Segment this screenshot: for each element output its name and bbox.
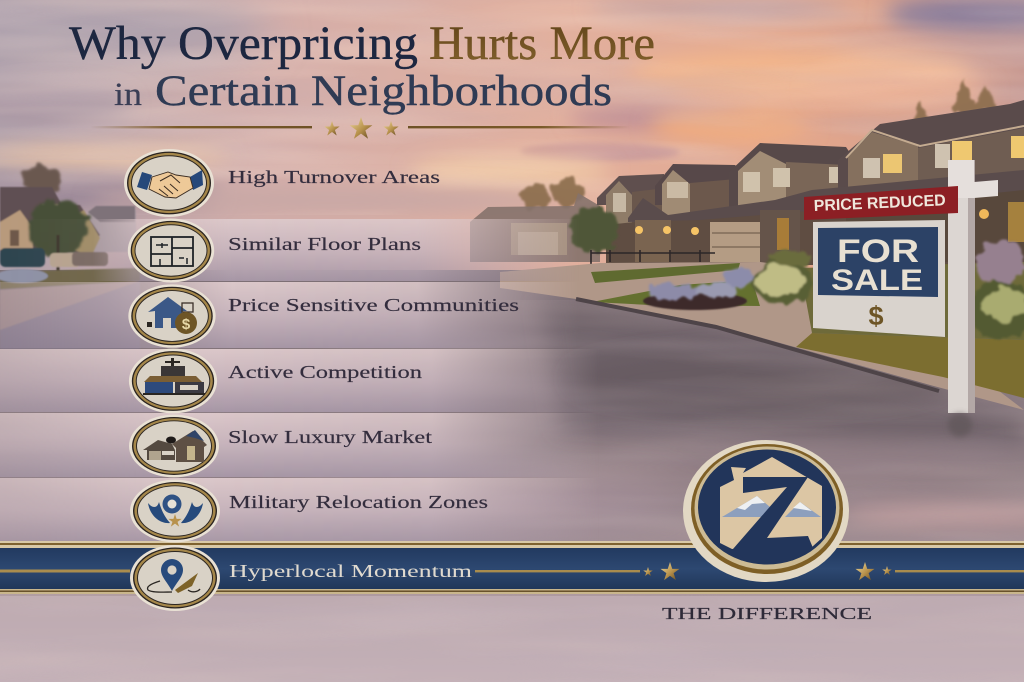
navy ribbon [0, 541, 1024, 594]
for sale board [813, 220, 945, 337]
item: similar floor plans [128, 218, 421, 283]
title: in [114, 77, 142, 113]
icon: house with money bag [147, 297, 197, 334]
translucent left panel rows [0, 219, 640, 543]
label: Similar Floor Plans [228, 234, 421, 254]
house 2 [597, 174, 666, 262]
mountains [722, 496, 821, 517]
item: slow luxury market [129, 415, 432, 477]
item: high turnover areas [124, 149, 440, 217]
house shape [720, 457, 822, 549]
trees behind houses [521, 80, 996, 209]
letter Z [733, 477, 813, 560]
icon: competing buildings [143, 358, 205, 395]
fence [591, 250, 715, 264]
neighborhood houses row [470, 80, 1024, 265]
label: Price Sensitive Communities [228, 295, 519, 315]
title: Certain Neighborhoods [155, 68, 612, 115]
label: High Turnover Areas [228, 167, 440, 187]
icon: house with money bag: $ [182, 316, 191, 333]
label: Active Competition [228, 362, 422, 382]
title divider with stars [90, 117, 630, 139]
icon: military wings emblem [148, 494, 203, 527]
price reduced banner [804, 186, 958, 220]
front lawns and sidewalks [500, 240, 1024, 410]
icon: floor plan [151, 237, 193, 266]
front tree [569, 206, 617, 254]
for sale board: FOR [837, 233, 919, 269]
icon: map pin with arrow [148, 559, 200, 593]
far faded house [470, 193, 600, 262]
lower storey [606, 170, 1024, 265]
sign post [948, 160, 998, 437]
for sale board: $ [868, 301, 884, 331]
title [69, 17, 655, 115]
item: hyperlocal momentum [130, 545, 473, 611]
street and reflective road surface [0, 270, 1024, 682]
icon: handshake [137, 170, 203, 198]
left background houses [0, 166, 140, 349]
logo tagline: THE DIFFERENCE [662, 604, 872, 623]
icon: luxury houses [143, 430, 207, 462]
flower beds and shrubs [650, 240, 1024, 340]
title: Hurts More [429, 17, 655, 70]
label: Military Relocation Zones [229, 492, 488, 512]
price reduced banner: PRICE REDUCED [813, 192, 946, 215]
for sale board: SALE [831, 264, 923, 297]
title: Why Overpricing [69, 17, 418, 70]
for sale sign [804, 160, 998, 437]
label: Slow Luxury Market [228, 427, 432, 447]
logo: Z house emblem [683, 440, 849, 582]
item: active competition [129, 349, 422, 413]
house 5 far right [838, 100, 1024, 215]
item: military relocation zones [130, 480, 488, 542]
sunset sky background [0, 0, 1024, 300]
house 4 [729, 143, 858, 210]
label: Hyperlocal Momentum [229, 561, 473, 581]
house 3 [655, 164, 748, 218]
item: price sensitive communities [128, 284, 519, 348]
